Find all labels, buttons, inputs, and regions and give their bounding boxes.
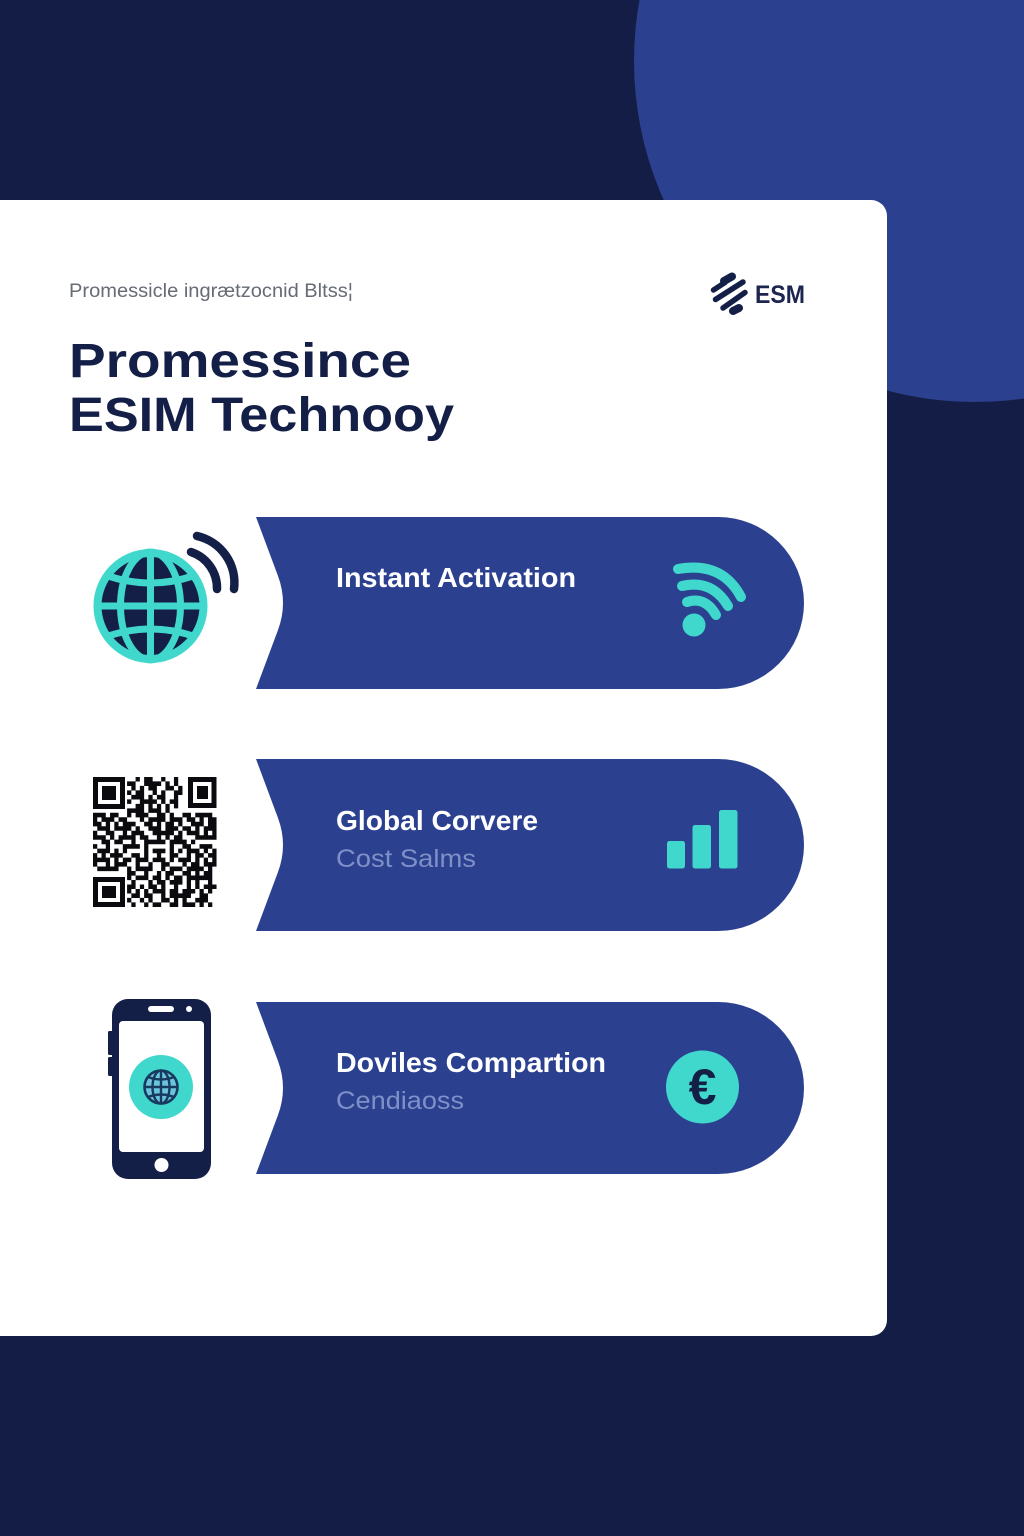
phone speaker: [148, 1006, 174, 1012]
phone camera: [186, 1006, 192, 1012]
banner subtext: Cost Salms: [336, 845, 476, 873]
globe grid lines: [97, 552, 204, 660]
phone screen: [119, 1021, 204, 1152]
phone side buttons: [108, 1031, 114, 1076]
euro sign: €: [689, 1059, 716, 1115]
icon: QR code: [93, 779, 217, 905]
decorative circle top right: [634, 0, 1024, 402]
phone body: [112, 999, 211, 1179]
small globe: [144, 1070, 178, 1104]
teal badge: [129, 1055, 193, 1119]
title line 2: ESIM Technooy: [69, 389, 454, 442]
globe disc: [98, 553, 204, 659]
white card panel: [0, 200, 887, 1336]
icon: smartphone: [108, 999, 211, 1179]
logo: ESM: [714, 276, 805, 311]
coin disc: [666, 1050, 739, 1124]
banner heading: Doviles Compartion: [336, 1047, 606, 1078]
logo wordmark: ESM: [755, 281, 805, 309]
phone home button: [154, 1158, 168, 1172]
panel: Global Corvere: [256, 759, 804, 931]
icon: globe with signal: [97, 536, 234, 660]
banner heading: Global Corvere: [336, 805, 538, 836]
banner subtext: Cendiaoss: [336, 1087, 464, 1115]
signal arcs: [191, 536, 234, 589]
panel: Instant Activation: [256, 517, 804, 689]
title: [69, 335, 454, 442]
panel: Doviles Compartion: [256, 1002, 804, 1174]
banner shape: [256, 1002, 804, 1174]
banner shape: [256, 759, 804, 931]
icon: euro coin: [666, 1050, 739, 1124]
eyebrow text: Promessicle ingrætzocnid Bltss¦: [69, 281, 353, 302]
icon: signal bars: [667, 810, 738, 868]
QR data modules: [93, 779, 217, 905]
card background: [0, 200, 887, 1336]
logo mark stripes: [714, 276, 745, 311]
banner shape: [256, 517, 804, 689]
banner heading: Instant Activation: [336, 562, 576, 593]
QR finder patterns: [96, 780, 214, 904]
QR finder centres: [102, 786, 208, 898]
title line 1: Promessince: [69, 335, 411, 388]
icon: wifi: [678, 568, 741, 636]
